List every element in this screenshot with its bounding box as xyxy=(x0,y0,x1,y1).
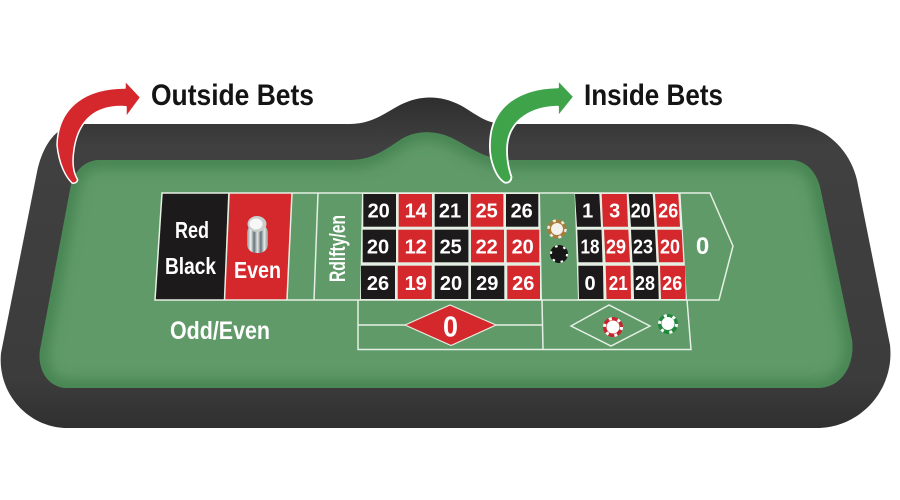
chip stack xyxy=(247,216,268,253)
cell numbers: 23 xyxy=(633,236,653,258)
cell numbers: 25 xyxy=(476,201,498,223)
heading: inside bets: Inside Bets xyxy=(584,79,723,112)
grid backing xyxy=(360,193,542,300)
cell numbers: 20 xyxy=(440,273,462,295)
cell numbers xyxy=(367,201,534,295)
label: red: Red xyxy=(175,217,209,243)
cell numbers: 12 xyxy=(405,236,427,258)
cell numbers: 20 xyxy=(660,236,680,258)
cell numbers: 14 xyxy=(405,201,428,223)
arrow: inside bets xyxy=(490,80,574,183)
cell numbers xyxy=(580,201,682,295)
chip: orange xyxy=(548,220,566,238)
table rail xyxy=(1,98,890,428)
outlined diamond xyxy=(571,305,650,346)
cell numbers: 20 xyxy=(367,236,389,258)
cell numbers: 20 xyxy=(368,201,390,223)
chip: green xyxy=(658,314,678,334)
cell numbers: 0 xyxy=(584,273,596,295)
chip: black xyxy=(550,245,568,263)
table xyxy=(0,98,900,428)
cell numbers: 1 xyxy=(582,201,593,223)
cell numbers: 26 xyxy=(662,273,682,295)
end zero: 0 xyxy=(696,233,709,260)
infographic: roulette table xyxy=(0,82,890,428)
panel: main number grid xyxy=(360,193,542,300)
label: rotated side text: Rdlfty/en xyxy=(325,215,350,282)
cell numbers: 20 xyxy=(512,236,534,258)
cell numbers: 22 xyxy=(476,236,498,258)
cell numbers: 26 xyxy=(512,273,534,295)
felt xyxy=(40,132,852,388)
cell numbers: 25 xyxy=(440,236,462,258)
cell numbers: 26 xyxy=(367,273,389,295)
panel: outside betting area xyxy=(155,193,733,345)
cell numbers: 21 xyxy=(439,201,461,223)
label: odd/even: Odd/Even xyxy=(170,317,270,345)
label: black: Black xyxy=(165,253,216,279)
panel: lower bet boxes xyxy=(358,300,691,350)
cell numbers: 3 xyxy=(609,201,620,223)
grid backing xyxy=(574,193,687,300)
cell numbers: 21 xyxy=(609,273,628,295)
number cells xyxy=(575,194,686,299)
red diamond xyxy=(405,305,496,346)
grid lines xyxy=(155,193,733,300)
cell numbers: 28 xyxy=(635,273,655,295)
cell numbers: 26 xyxy=(658,201,678,223)
label: even: Even xyxy=(234,257,281,283)
cell numbers: 29 xyxy=(606,236,626,258)
heading: outside bets: Outside Bets xyxy=(151,79,314,112)
cell numbers: 18 xyxy=(580,236,600,258)
black box xyxy=(155,194,228,300)
cell numbers: 29 xyxy=(476,273,498,295)
red box xyxy=(225,194,292,300)
cell numbers: 19 xyxy=(405,273,427,295)
diamond zero: 0 xyxy=(443,312,458,344)
arrow: outside bets xyxy=(57,81,141,183)
cell numbers: 26 xyxy=(511,201,533,223)
bet box lines xyxy=(358,300,691,350)
number cells xyxy=(361,194,540,299)
cell numbers: 20 xyxy=(631,201,651,223)
panel: right number grid xyxy=(574,193,709,300)
chip: red xyxy=(603,317,623,337)
